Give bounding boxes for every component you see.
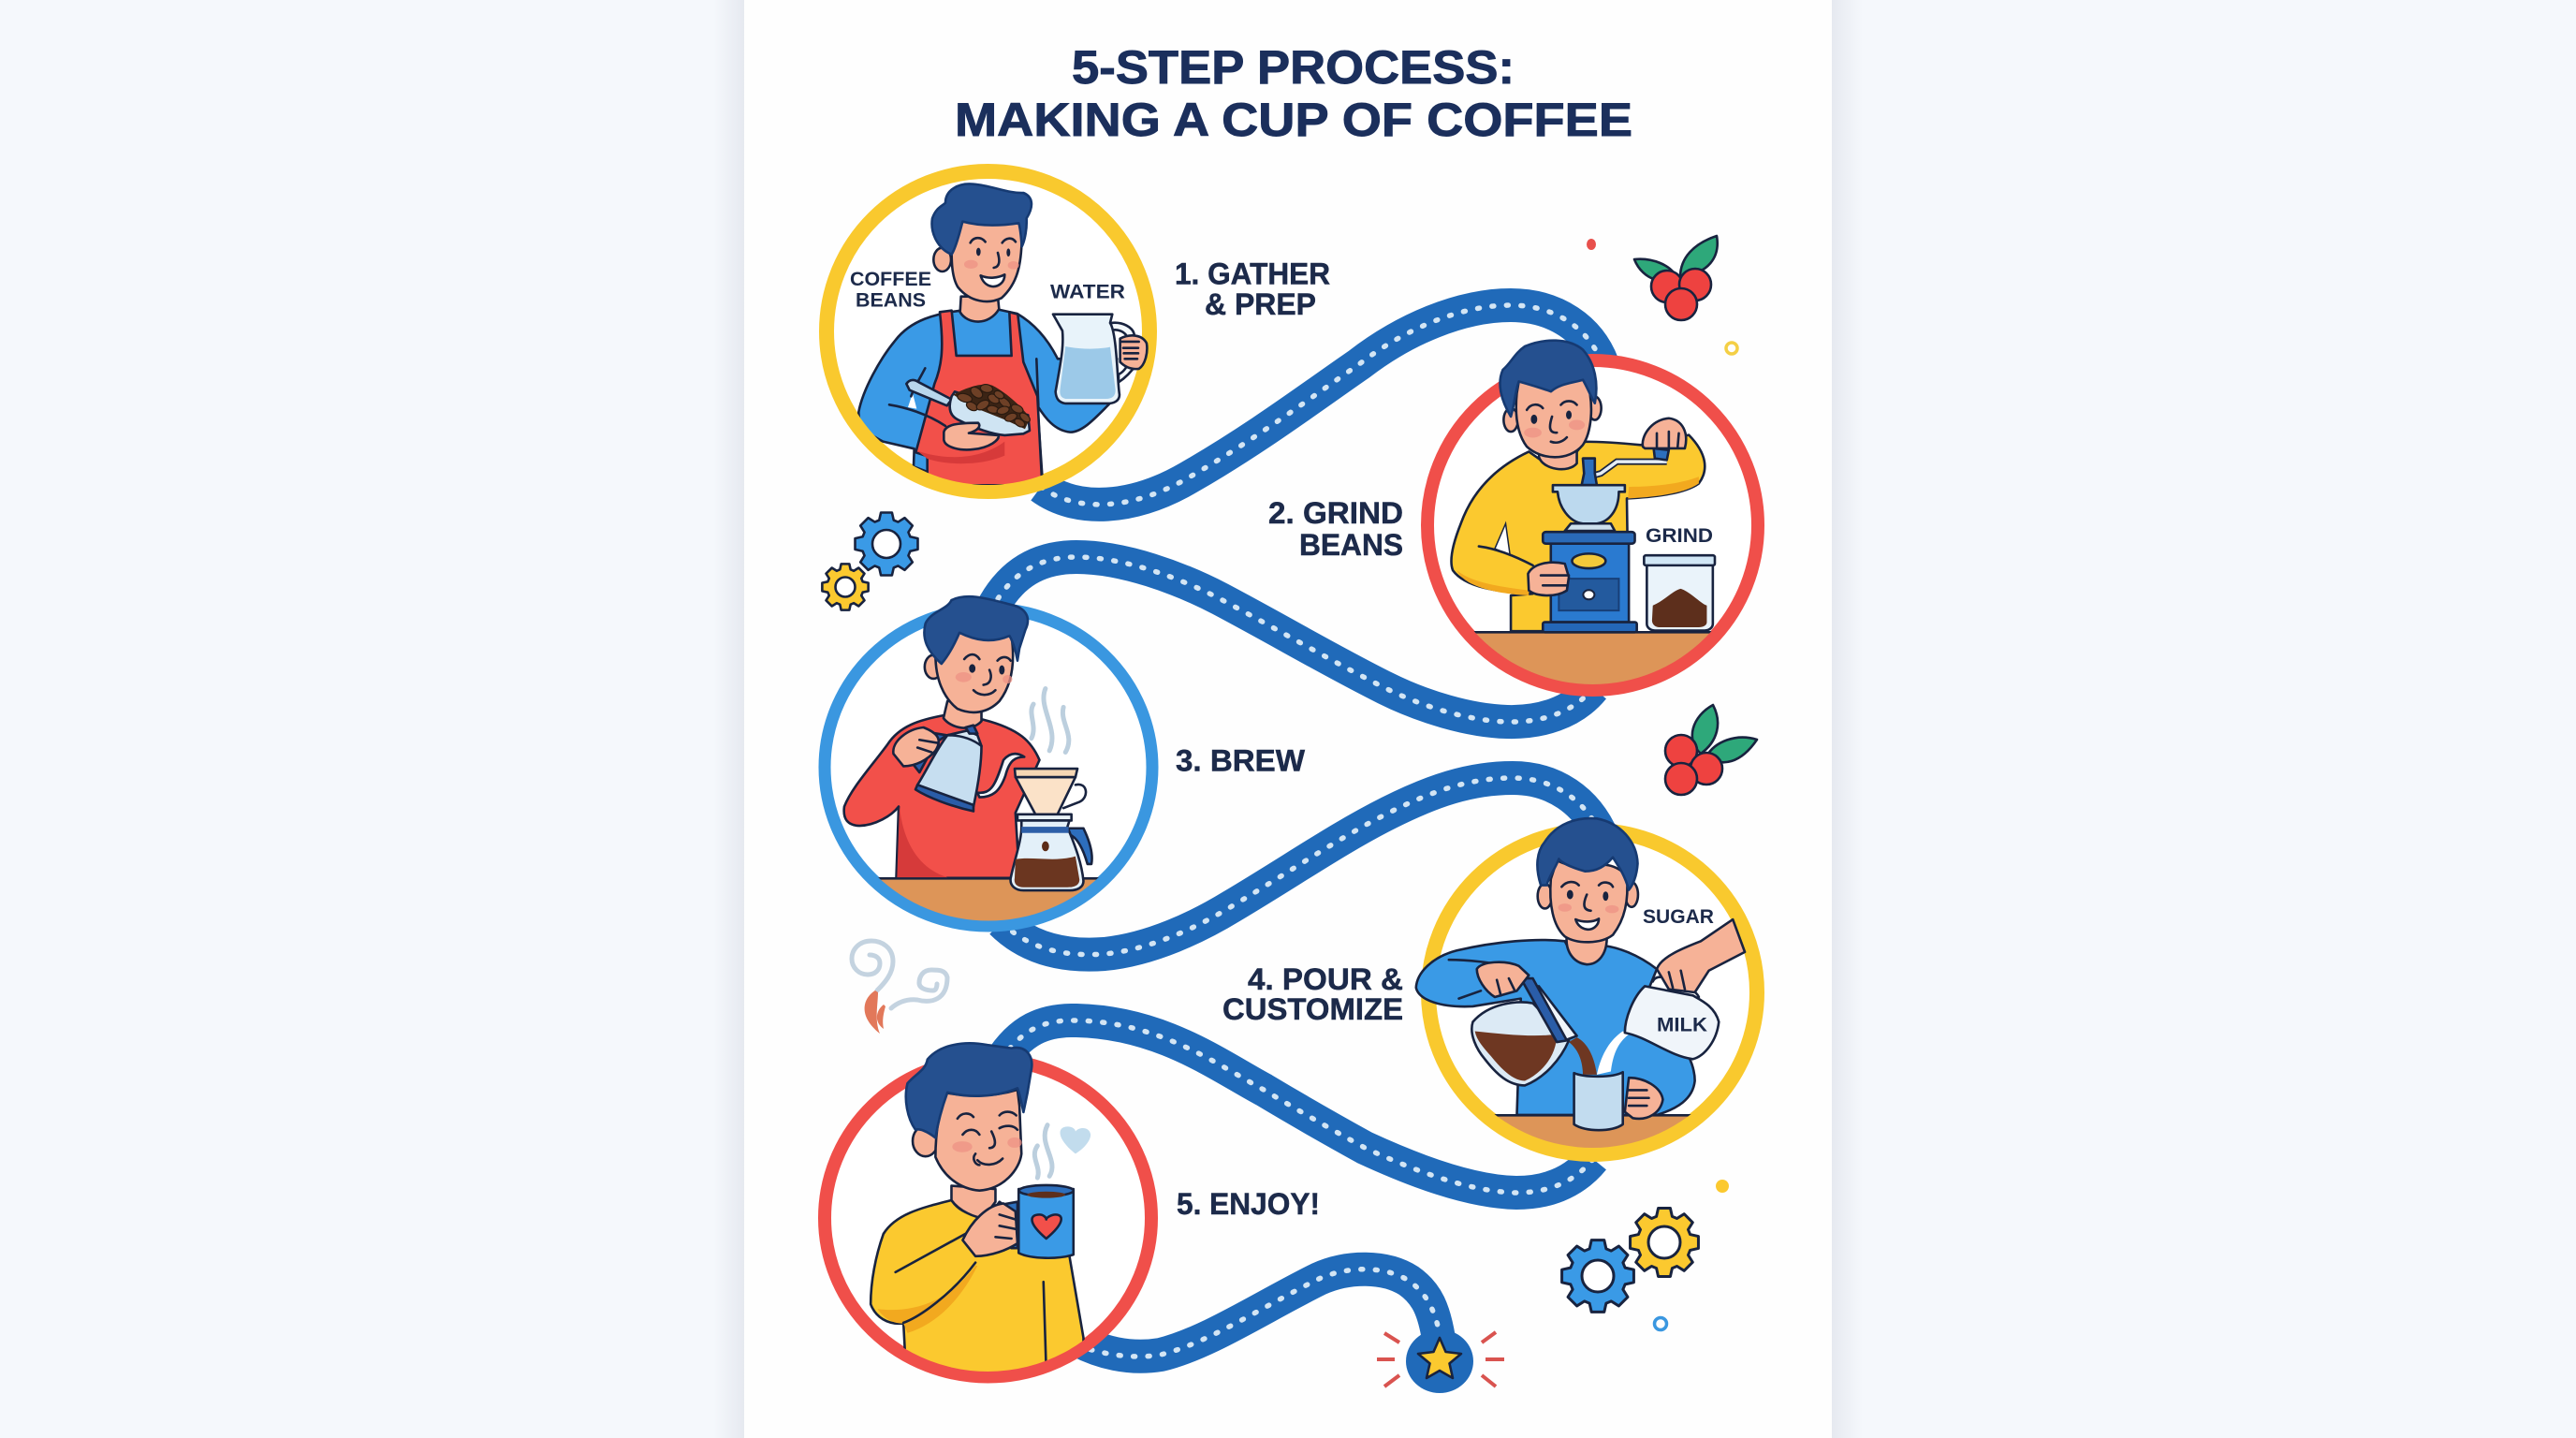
ring blue xyxy=(825,609,1152,926)
icon: coffee berries middle xyxy=(1665,705,1757,795)
panel: step 2 grind beans xyxy=(1421,339,1764,697)
heading: step 1: 1. GATHER xyxy=(1175,257,1330,290)
road segment 4 to 5 xyxy=(1000,1020,1593,1193)
heading: step 2: BEANS xyxy=(1299,528,1403,562)
label: coffee beans: COFFEE xyxy=(850,269,931,290)
label: coffee beans: BEANS xyxy=(856,290,926,311)
steam and heart xyxy=(1034,1125,1090,1178)
icon: gears top left xyxy=(822,513,917,610)
road segment 3 to 4 xyxy=(1002,778,1603,955)
title xyxy=(955,41,1632,146)
heading: step 4: 4. POUR & xyxy=(1248,962,1403,996)
panel: step 4 pour and customize xyxy=(1404,818,1778,1171)
icon: coffee berries top xyxy=(1634,236,1718,320)
white poster panel xyxy=(744,0,1832,1438)
character turning coffee grinder xyxy=(1451,341,1715,632)
gooseneck kettle xyxy=(914,726,1024,812)
wooden table xyxy=(1473,631,1711,684)
heading: step 5: 5. ENJOY! xyxy=(1177,1187,1320,1221)
label: water: WATER xyxy=(1050,281,1125,303)
road segment 5 to finish xyxy=(1067,1269,1439,1357)
heading: step 1: & PREP xyxy=(1205,287,1316,321)
label: coffee beans xyxy=(850,269,931,311)
label: sugar: SUGAR xyxy=(1643,906,1714,928)
coffee and milk streams xyxy=(1569,1037,1597,1075)
heading: step 4: CUSTOMIZE xyxy=(1222,992,1403,1026)
winding road path xyxy=(992,305,1604,1357)
title: 5-STEP PROCESS: xyxy=(1072,41,1515,94)
steam xyxy=(1032,689,1069,753)
heading: step 2 xyxy=(1268,496,1403,562)
icon: steam swirl xyxy=(852,941,947,1034)
icon: gears bottom right xyxy=(1562,1209,1698,1312)
wooden table xyxy=(878,877,1099,921)
heading: step 1 xyxy=(1175,257,1330,321)
road segment 2 to 3 xyxy=(992,557,1593,722)
character enjoying coffee xyxy=(871,1043,1090,1385)
decorative dots xyxy=(1587,239,1737,1329)
other arm and milk pitcher xyxy=(1625,919,1745,1059)
ring red xyxy=(825,1060,1151,1376)
panel: step 5 enjoy xyxy=(825,1043,1151,1385)
heading: step 2: 2. GRIND xyxy=(1268,496,1403,530)
infographic canvas xyxy=(730,0,1846,1438)
mug xyxy=(1574,1072,1662,1130)
mug with heart xyxy=(1000,1185,1074,1258)
wooden table xyxy=(1494,1114,1690,1148)
heading: step 4 xyxy=(1222,962,1403,1026)
heading: step 3: 3. BREW xyxy=(1176,743,1306,777)
ring yellow xyxy=(1428,830,1757,1154)
character pouring coffee and milk xyxy=(1416,818,1745,1130)
road segment 1 to 2 xyxy=(1041,305,1604,505)
ring yellow xyxy=(827,171,1149,492)
left panel shadow xyxy=(713,0,744,1438)
right panel shadow xyxy=(1832,0,1863,1438)
character pouring from gooseneck kettle xyxy=(844,596,1092,890)
title: MAKING A CUP OF COFFEE xyxy=(955,94,1632,146)
panel: step 3 brew xyxy=(824,596,1161,944)
ring red xyxy=(1427,360,1758,690)
label: milk: MILK xyxy=(1657,1015,1707,1035)
panel: step 1 gather and prep xyxy=(827,171,1149,492)
coffee carafe xyxy=(1471,978,1577,1085)
pour-over dripper and carafe xyxy=(1011,769,1092,890)
finish star badge xyxy=(1377,1329,1504,1393)
jar of ground coffee xyxy=(1644,555,1715,631)
label: grind: GRIND xyxy=(1646,525,1713,547)
character with apron, beans and water pitcher xyxy=(858,183,1147,485)
